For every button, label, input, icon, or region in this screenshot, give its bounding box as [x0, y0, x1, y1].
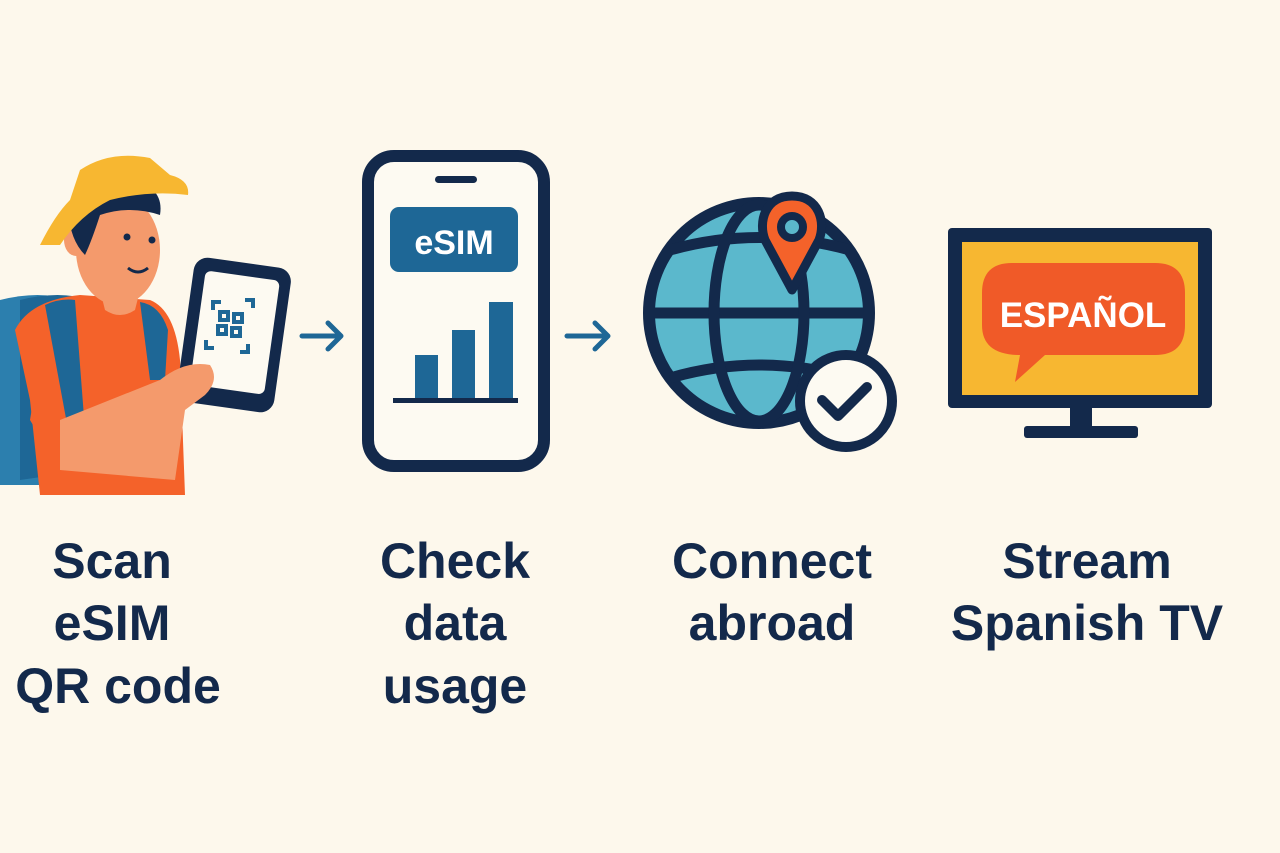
label: Scan eSIM QR code: Scan [52, 533, 172, 589]
label: Check data usage [380, 533, 530, 714]
icon: TV with ESPAÑOL bubble: ESPAÑOL [1000, 296, 1166, 335]
label: Connect abroad: Connect [672, 533, 872, 589]
icon: traveler scanning QR code [0, 156, 293, 495]
label: Connect abroad [672, 533, 872, 651]
label: Stream Spanish TV: Stream [1002, 533, 1172, 589]
label: Scan eSIM QR code [15, 533, 221, 714]
arrow 1 [302, 323, 341, 349]
label: Connect abroad: abroad [689, 595, 855, 651]
icon: globe with pin and check [649, 196, 892, 447]
icon: TV with ESPAÑOL bubble [948, 228, 1212, 438]
label: Stream Spanish TV: Spanish TV [951, 595, 1224, 651]
icon: phone with eSIM and chart: eSIM [414, 224, 494, 262]
label: Scan eSIM QR code: eSIM [54, 595, 170, 651]
label: Scan eSIM QR code: QR code [15, 658, 221, 714]
arrow 2 [567, 323, 608, 349]
label: Check data usage: data [404, 595, 508, 651]
label: Stream Spanish TV [951, 533, 1224, 651]
label: Check data usage: Check [380, 533, 530, 589]
label: Check data usage: usage [383, 658, 527, 714]
icon: phone with eSIM and chart [368, 156, 544, 466]
